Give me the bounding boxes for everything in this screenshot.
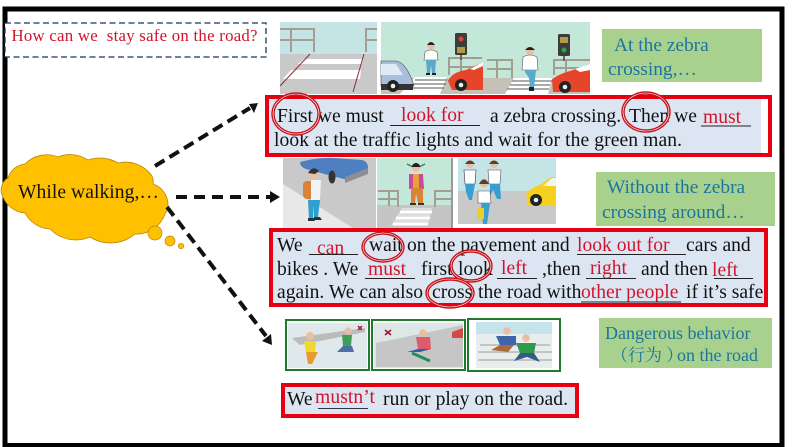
sentence panel: zebra crossing: look at the traffic lights and wait for the green man. <box>274 130 682 151</box>
question box: How can we stay safe on the road? <box>12 26 258 45</box>
icon: blue car <box>300 158 368 184</box>
question box <box>5 23 266 57</box>
label: without the zebra crossing: crossing around… <box>602 202 745 223</box>
arrow to no crossing <box>176 191 280 203</box>
circle: Then <box>623 93 669 131</box>
arrow to zebra crossing <box>155 103 258 166</box>
picture: kids playing football <box>286 320 369 370</box>
sentence panel: without crossing: look <box>458 259 493 280</box>
circle: wait <box>363 233 403 261</box>
sentence panel: without crossing <box>271 230 766 307</box>
sentence panel: without crossing: left <box>501 258 528 279</box>
sentence panel: without crossing: first <box>421 259 453 280</box>
sentence panel: without crossing: left <box>712 260 739 281</box>
sentence panel: without crossing: can <box>317 238 344 259</box>
sentence panel: without crossing: ,then <box>542 259 581 280</box>
sentence panel: zebra crossing <box>267 93 770 155</box>
sentence panel: without crossing: right <box>590 258 628 279</box>
sentence panel: without crossing: must <box>368 259 407 280</box>
label: dangerous behavior <box>599 318 772 368</box>
sentence panel: zebra crossing: look for <box>401 105 464 126</box>
sentence panel: zebra crossing: must <box>703 107 742 128</box>
figure: girl with bag <box>477 178 491 224</box>
circle: First <box>273 94 319 134</box>
thought cloud <box>1 155 184 249</box>
figure: girl <box>407 162 425 205</box>
sentence panel: without crossing: wait <box>369 235 403 256</box>
image: girl on the pavement <box>377 158 453 228</box>
label: dangerous behavior: （行为 ） <box>611 346 683 365</box>
thought cloud: While walking,… <box>18 182 159 203</box>
sentence panel: without crossing: cars and <box>686 235 751 256</box>
sentence panel: zebra crossing: a zebra crossing. <box>490 106 621 127</box>
sentence panel: zebra crossing: Then we <box>629 106 697 127</box>
figure: boy waiting <box>424 42 438 75</box>
label: at the zebra crossing <box>602 29 762 82</box>
image: crossing with traffic lights <box>381 22 590 94</box>
icon: blue car <box>381 61 414 92</box>
picture: boy skateboarding <box>372 320 465 370</box>
sentence panel: without crossing: We <box>277 235 303 256</box>
sentence panel: without crossing: look out for <box>577 235 670 256</box>
sentence panel: without crossing: bikes . We <box>277 259 359 280</box>
sentence panel: without crossing: other people <box>581 282 679 303</box>
icon: traffic light one <box>455 33 467 60</box>
icon: yellow car <box>526 177 556 206</box>
label: at the zebra crossing: At the zebra <box>614 35 709 56</box>
sentence panel: without crossing: if it’s safe <box>686 282 764 303</box>
circle: look <box>451 251 491 281</box>
sentence panel: without crossing: cross <box>432 282 472 303</box>
figure: boy with backpack <box>303 168 322 221</box>
sentence panel: mustn't: We <box>287 389 313 410</box>
image: children crossing the road <box>458 158 556 224</box>
icon: red car two <box>552 64 590 93</box>
label: without the zebra crossing <box>596 172 775 226</box>
label: without the zebra crossing: Without the zebra <box>607 177 746 198</box>
sentence panel: mustn't: mustn’t <box>315 387 376 408</box>
icon: red car one <box>448 62 483 91</box>
label: dangerous behavior: on the road <box>677 345 758 365</box>
picture: boys running across the road <box>468 319 560 371</box>
arrow to dangerous behaviour <box>167 207 272 345</box>
figure: child left <box>464 160 476 200</box>
sentence panel: without crossing: again. We can also <box>277 282 423 303</box>
icon: traffic light two <box>558 34 570 61</box>
image: boy on the pavement <box>283 158 376 228</box>
image: empty zebra crossing <box>280 22 377 94</box>
label: at the zebra crossing: crossing,… <box>608 59 697 80</box>
sentence panel: without crossing: and then <box>641 259 708 280</box>
sentence panel: mustn't <box>283 385 577 416</box>
figure: child right <box>488 160 501 199</box>
figure: boy crossing <box>522 47 538 91</box>
sentence panel: zebra crossing: First we must <box>277 106 384 127</box>
label: dangerous behavior: Dangerous behavior <box>605 323 750 343</box>
circle: cross <box>427 279 473 307</box>
sentence panel: without crossing: on the pavement and <box>407 235 570 256</box>
sentence panel: without crossing: the road with <box>478 282 582 303</box>
sentence panel: mustn't: run or play on the road. <box>383 389 568 410</box>
